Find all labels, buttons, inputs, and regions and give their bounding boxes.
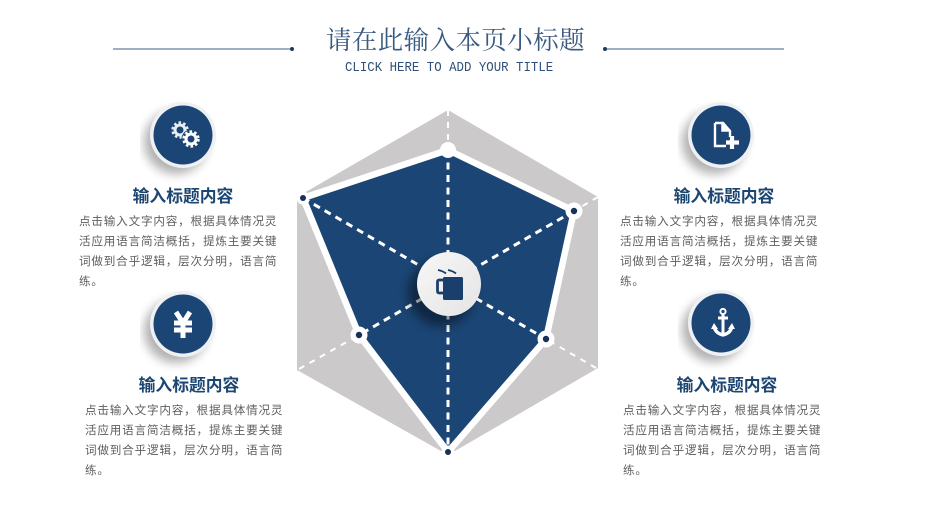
- body text: 点击输入文字内容，根据具体情况灵: [623, 404, 821, 417]
- heading: 输入标题内容: [139, 376, 239, 395]
- inner dashed axes: [303, 150, 574, 452]
- icon: gears: [140, 102, 216, 180]
- body text: [620, 215, 818, 288]
- heading: 输入标题内容: [674, 187, 774, 206]
- block: bottom right: [623, 376, 821, 477]
- body text: 词做到合乎逻辑，层次分明，语言简: [79, 255, 277, 268]
- body text: 点击输入文字内容，根据具体情况灵: [79, 215, 277, 228]
- data point markers: [296, 142, 582, 458]
- body text: [85, 404, 283, 477]
- icon: anchor: [678, 290, 754, 368]
- center disc with mug icon: [408, 252, 481, 326]
- body text: 活应用语言简洁概括，提炼主要关键: [79, 235, 277, 248]
- body text: 词做到合乎逻辑，层次分明，语言简: [620, 255, 818, 268]
- body text: 活应用语言简洁概括，提炼主要关键: [623, 424, 821, 437]
- body text: 词做到合乎逻辑，层次分明，语言简: [85, 444, 283, 457]
- block: top left: [79, 187, 277, 288]
- body text: 点击输入文字内容，根据具体情况灵: [620, 215, 818, 228]
- body text: 词做到合乎逻辑，层次分明，语言简: [623, 444, 821, 457]
- outer dashed axes: [299, 110, 598, 369]
- title rule left: [113, 47, 294, 51]
- body text: 点击输入文字内容，根据具体情况灵: [85, 404, 283, 417]
- hexagon background: [297, 110, 598, 455]
- body text: 活应用语言简洁概括，提炼主要关键: [85, 424, 283, 437]
- subtitle: CLICK HERE TO ADD YOUR TITLE: [345, 60, 553, 76]
- icon: yen: [140, 291, 216, 368]
- body text: 练。: [79, 275, 104, 288]
- body text: 练。: [623, 464, 648, 477]
- heading: 输入标题内容: [133, 187, 233, 206]
- body text: 活应用语言简洁概括，提炼主要关键: [620, 235, 818, 248]
- body text: 练。: [620, 275, 645, 288]
- body text: 练。: [85, 464, 110, 477]
- heading: 输入标题内容: [677, 376, 777, 395]
- body text: [79, 215, 277, 288]
- body text: [623, 404, 821, 477]
- block: bottom left: [85, 376, 283, 477]
- icon: document plus: [678, 102, 754, 180]
- title rule right: [603, 47, 784, 51]
- block: top right: [620, 187, 818, 288]
- title: 请在此输入本页小标题: [326, 26, 585, 55]
- blue data polygon: [303, 150, 574, 452]
